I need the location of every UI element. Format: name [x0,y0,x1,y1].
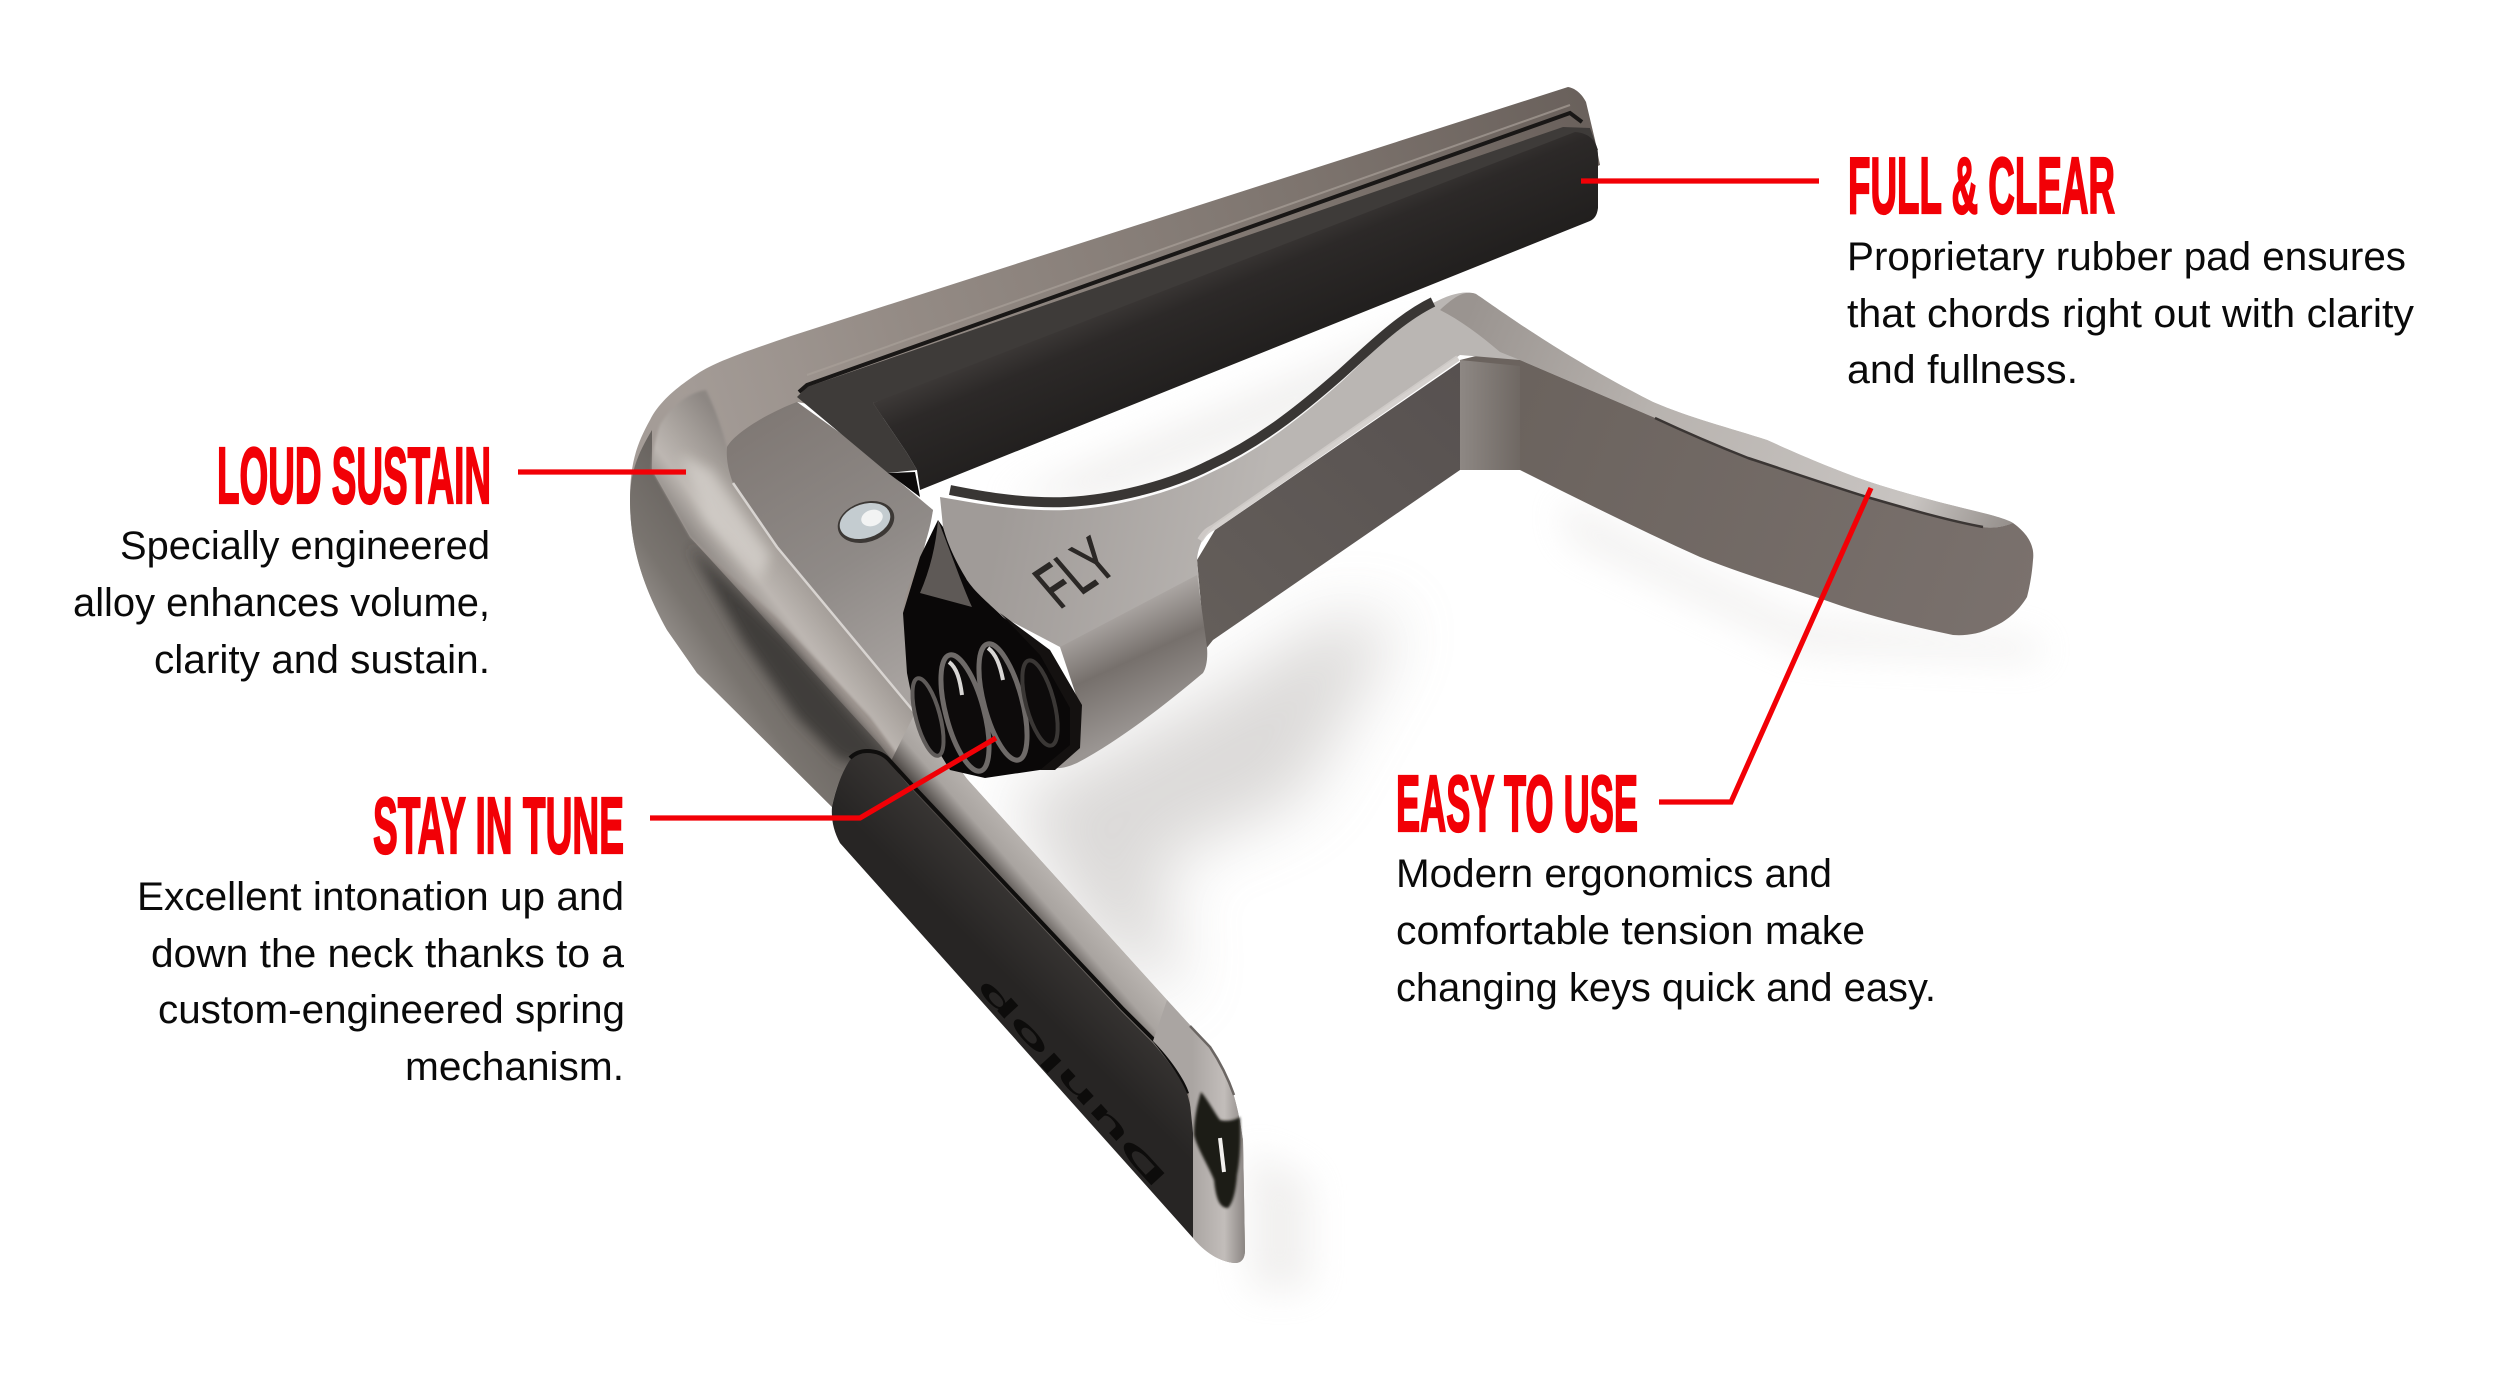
lever top band sheen [1440,293,2013,528]
capo product photo [630,87,2040,1290]
spring coils [906,639,1065,776]
lever inner wall [1197,362,1460,650]
lever highlight ridge [1200,358,1458,540]
engraved FLY: FLY [1020,524,1130,621]
chrome tip [1153,1000,1245,1263]
lever right arm face [1460,350,2033,635]
callout: loud sustain [73,431,491,682]
text: LOUD SUSTAIN [217,431,491,520]
silver band [652,390,990,817]
callout: easy to use: changing keys quick and easy. [1396,966,1936,1010]
panel edge highlight [733,483,915,713]
callout: full and clear: and fullness. [1847,348,2078,392]
silver edge strip [890,713,1210,1090]
front panel around pin [727,402,933,713]
rubber edge on lever [950,302,1433,502]
moulded logo: Dunlop [968,974,1172,1193]
callout: stay in tune: mechanism. [405,1045,624,1089]
callout: full and clear [1847,141,2414,392]
lower rubber pad [832,751,1193,1238]
callout: easy to use [1396,759,1936,1010]
lever head and top band [940,292,2013,650]
side face of the body [630,430,900,807]
callout: easy to use: Modern ergonomics and [1396,852,1832,896]
lever [940,292,2033,770]
speckled highlight [680,455,770,580]
metal body [630,87,1600,1263]
black rim of lever head [1000,613,1082,770]
cast shadows [1010,620,1400,1000]
coil glints [949,648,1003,695]
callout: loud sustain: Specially engineered [120,524,490,568]
callout: stay in tune: custom-engineered spring [158,988,625,1032]
callout: stay in tune [137,781,625,1089]
callout: full and clear: FULL & CLEAR [1848,141,2115,230]
callout: loud sustain: alloy enhances volume, [73,581,490,625]
text: STAY IN TUNE [373,781,624,870]
lever inner column [1460,360,1520,470]
dark band along body [690,547,900,770]
cam wedge [920,520,972,607]
callout: easy to use: EASY TO USE [1396,759,1638,848]
thin dark groove at arm [1655,418,1983,527]
callout: full and clear: that chords right out with clarity [1847,292,2414,336]
callout: stay in tune: Excellent intonation up and [137,875,624,919]
callout: stay in tune: down the neck thanks to a [151,932,625,976]
callout: easy to use: comfortable tension make [1396,909,1865,953]
callout: full and clear: Proprietary rubber pad ensures [1847,235,2406,279]
pin [832,494,900,550]
lever side face [1053,575,1207,768]
callout: loud sustain: clarity and sustain. [154,638,490,682]
leader lines [518,181,1871,818]
faint shadow under pad and arm [1000,320,2040,1290]
upper rubber pad [797,105,1598,497]
dark cavity [903,520,1080,778]
